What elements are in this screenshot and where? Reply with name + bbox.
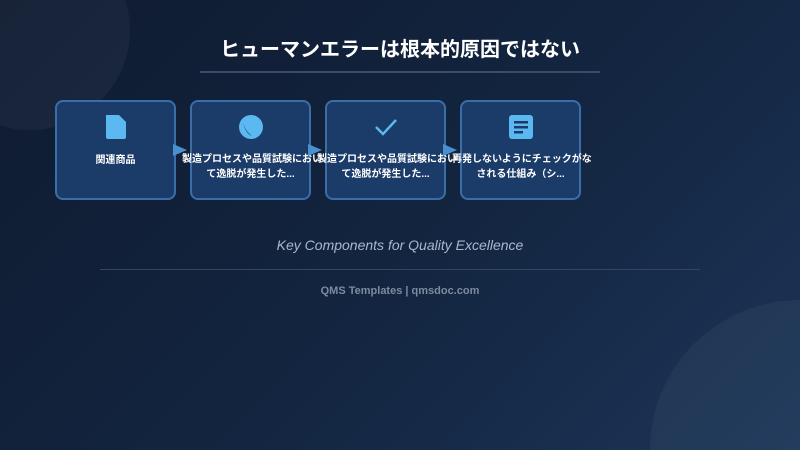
text: [317, 153, 457, 180]
text: 製造プロセスや品質試験におい: [182, 154, 322, 165]
text: て逸脱が発生した...: [206, 169, 295, 180]
subtitle: Key Components for Quality Excellence: [277, 237, 523, 253]
text: 関連商品: [96, 155, 136, 166]
card 3: [325, 100, 446, 200]
text: 製造プロセスや品質試験におい: [317, 154, 457, 165]
title: ヒューマンエラーは根本的原因ではない: [220, 39, 580, 61]
card 4: [460, 100, 581, 200]
arrow 1: [173, 144, 187, 156]
arrow 3: [443, 144, 457, 156]
text: 再発しないようにチェックがな: [452, 154, 592, 165]
icon: document: [106, 115, 126, 139]
icon: list: [509, 115, 533, 139]
arrow 2: [308, 144, 322, 156]
footer: QMS Templates | qmsdoc.com: [321, 285, 479, 297]
text: [452, 152, 592, 180]
icon: circle: [239, 115, 263, 139]
card 2: [190, 100, 311, 200]
text: [182, 153, 322, 180]
card 1: [55, 100, 176, 200]
text: て逸脱が発生した...: [341, 169, 430, 180]
icon: check: [375, 119, 397, 136]
text: される仕組み（シ...: [476, 169, 565, 180]
